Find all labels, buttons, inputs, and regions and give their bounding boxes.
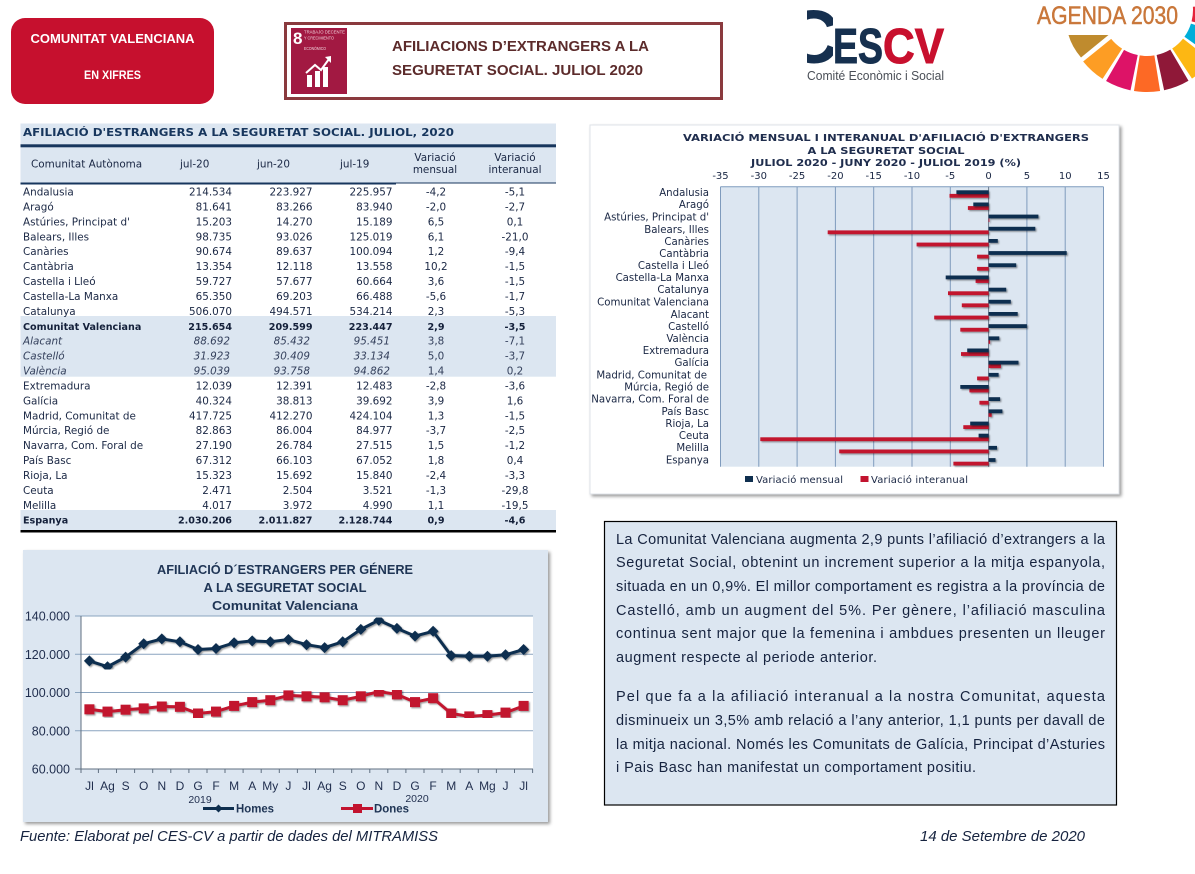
logo: CES-CV — [807, 10, 944, 80]
category labels: Aragó — [679, 199, 709, 211]
row: Rioja: -3,3 — [505, 470, 525, 482]
date: 14 de Setembre de 2020 — [920, 828, 1086, 845]
row: País Basc: 67.052 — [356, 455, 392, 467]
row: Cantàbria: 12.118 — [276, 261, 312, 273]
row: Comunitat Valenciana: 215.654 — [188, 322, 232, 333]
row: Aragó: -2,0 — [426, 201, 446, 213]
row: Extremadura — [23, 380, 525, 392]
x axis labels: Ag — [317, 779, 332, 793]
row: Galícia: 1,6 — [507, 395, 523, 407]
row: Cantàbria: 10,2 — [424, 261, 448, 273]
title text: SEGURETAT SOCIAL. JULIOL 2020 — [392, 63, 643, 79]
chart title: AFILIACIÓ D´ESTRANGERS PER GÉNERE — [157, 562, 413, 577]
row: Extremadura: Extremadura — [23, 380, 91, 392]
row: Castelló: -3,7 — [505, 351, 525, 363]
x axis labels: -35 — [712, 171, 729, 182]
band: Comunitat Valenciana rows — [20, 316, 556, 377]
x axis labels: Ag — [100, 779, 115, 793]
row: Rioja: Rioja, La — [23, 470, 67, 482]
badge: Comunitat Valenciana en xifres: EN XIFRES — [84, 68, 141, 82]
row: Cantàbria — [23, 261, 525, 273]
table header: Variació — [494, 152, 536, 164]
x axis labels: M — [229, 779, 239, 793]
row: Canàries: 100.094 — [350, 246, 393, 258]
category labels: València — [666, 333, 709, 345]
row: Cantàbria: 13.558 — [356, 261, 392, 273]
row: Múrcia: 84.977 — [356, 425, 392, 437]
row: Ceuta: 3.521 — [363, 485, 392, 497]
category labels: Astúries, Principat d' — [604, 212, 709, 224]
panel: data table — [20, 124, 556, 532]
row: Espanya: 0,9 — [428, 516, 445, 527]
x axis labels: -25 — [789, 171, 805, 182]
icon: SDG 8 decent work and economic growth — [291, 28, 347, 94]
row: Catalunya: 494.571 — [270, 306, 312, 318]
row: Comunitat Valenciana — [23, 322, 525, 333]
panel: bar chart variation — [590, 125, 1119, 494]
rule: table bottom — [20, 530, 556, 532]
bars: variació interanual — [760, 194, 1001, 466]
x axis labels: A — [465, 779, 473, 793]
category labels: Galícia — [675, 357, 709, 369]
row: Castella i Lleó: Castella i Lleó — [23, 276, 96, 288]
row: Madrid: 1,3 — [428, 410, 444, 422]
row: València: 95.039 — [194, 366, 230, 378]
x axis labels: Mg — [479, 779, 496, 793]
row: Aragó: 83.940 — [356, 201, 392, 213]
row: Astúries: 0,1 — [507, 216, 523, 228]
row: Castella-La Manxa: -5,6 — [426, 291, 446, 303]
row: Navarra: 27.190 — [196, 440, 232, 452]
row: Andalusia: 214.534 — [189, 186, 232, 198]
bars: variació mensual — [946, 190, 1067, 462]
x axis labels: 15 — [1097, 171, 1110, 182]
row: Castelló: 30.409 — [274, 351, 310, 363]
chart title: A LA SEGURETAT SOCIAL — [204, 580, 367, 595]
x axis labels: -10 — [904, 171, 920, 182]
table header — [20, 144, 556, 184]
row: Astúries: Astúries, Principat d' — [23, 216, 130, 228]
row: València: 94.862 — [354, 366, 390, 378]
row: Andalusia — [23, 186, 525, 198]
row: Astúries: 15.189 — [356, 216, 392, 228]
row: Cantàbria: -1,5 — [505, 261, 525, 273]
category labels: Ceuta — [679, 431, 709, 442]
x axis labels: -20 — [827, 171, 844, 182]
chart title: VARIACIÓ MENSUAL I INTERANUAL D'AFILIACIÓ D'EXTRANGERS — [683, 131, 1089, 144]
legend — [745, 474, 968, 486]
row: Alacant: 95.451 — [354, 336, 390, 348]
legend — [203, 802, 409, 816]
row: País Basc: 1,8 — [428, 455, 444, 467]
row: Múrcia: 86.004 — [276, 425, 313, 437]
x axis labels: M — [446, 779, 456, 793]
text block: analysis — [604, 522, 1116, 805]
row: Navarra: 1,5 — [428, 440, 444, 452]
row: Espanya: 2.030.206 — [178, 516, 232, 527]
row: Aragó: 81.641 — [196, 201, 232, 213]
table header: Comunitat Autònoma — [31, 158, 142, 170]
text block: analysis: Seguretat Social, obtenint un increment superior a la mitja espanyola, — [616, 555, 1105, 571]
category labels: País Basc — [662, 406, 709, 418]
row: Balears: -21,0 — [502, 231, 528, 243]
x axis labels: G — [410, 779, 420, 793]
x axis labels — [85, 779, 528, 806]
row: Melilla — [23, 500, 528, 512]
row: Astúries: 14.270 — [276, 216, 312, 228]
row: Balears: 93.026 — [276, 231, 312, 243]
legend: Variació interanual — [871, 474, 968, 486]
row: Espanya: 2.128.744 — [338, 516, 393, 527]
y axis labels — [25, 610, 70, 776]
y axis labels: 120.000 — [25, 648, 70, 662]
x axis labels: A — [248, 779, 256, 793]
row: Melilla: 4.017 — [202, 500, 232, 512]
row: Rioja: 15.323 — [196, 470, 232, 482]
row: País Basc: 67.312 — [196, 455, 232, 467]
category labels: Alacant — [671, 310, 709, 321]
row: Rioja: 15.692 — [276, 470, 312, 482]
row: País Basc — [23, 455, 524, 467]
x axis labels: Jl — [85, 779, 94, 793]
x axis labels: S — [122, 779, 130, 793]
row: Extremadura: 12.039 — [196, 380, 232, 392]
row: Castella-La Manxa: 69.203 — [276, 291, 312, 303]
category labels: Castella i Lleó — [638, 260, 709, 272]
row: Canàries — [23, 246, 526, 258]
table header: mensual — [413, 164, 457, 176]
row: Múrcia: 82.863 — [196, 425, 232, 437]
row: València: 0,2 — [507, 366, 523, 378]
row: Rioja: 15.840 — [356, 470, 392, 482]
logo: CES-CV: Comité Econòmic i Social — [807, 69, 944, 83]
source note: Fuente: Elaborat pel CES-CV a partir de dades del MITRAMISS — [20, 828, 438, 845]
row: País Basc: 0,4 — [507, 455, 524, 467]
row: Catalunya: Catalunya — [23, 306, 76, 318]
row: Astúries — [23, 216, 523, 228]
row: Navarra: 26.784 — [276, 440, 313, 452]
chart title: Comunitat Valenciana — [212, 598, 359, 613]
row: Múrcia: -2,5 — [505, 425, 525, 437]
row: València — [23, 366, 523, 378]
table header: jun-20 — [256, 158, 290, 170]
x axis labels: J — [502, 779, 508, 793]
row: Castella-La Manxa: 65.350 — [196, 291, 232, 303]
row: Alacant: 85.432 — [274, 336, 310, 348]
table header: Variació — [414, 152, 456, 164]
x axis labels: S — [339, 779, 347, 793]
row: Ceuta: -1,3 — [426, 485, 446, 497]
row: Castelló — [23, 351, 525, 363]
category labels: Múrcia, Regió de — [624, 382, 709, 394]
row: Extremadura: 12.483 — [356, 380, 392, 392]
x axis labels: 0 — [985, 171, 992, 182]
x axis labels: 2019 — [188, 794, 212, 806]
badge: Comunitat Valenciana en xifres: COMUNITAT VALENCIANA — [30, 32, 194, 46]
row: Ceuta: 2.504 — [283, 485, 313, 497]
category labels: Espanya — [666, 456, 709, 466]
text block: analysis: augment respecte al periode anterior. — [616, 650, 877, 666]
row: Galícia: Galícia — [23, 395, 58, 407]
legend: Homes — [236, 802, 274, 816]
text block: analysis: i Pais Basc han manifestat un comportament positiu. — [616, 760, 976, 776]
icon: SDG 8 decent work and economic growth: TRABAJO DECENTE — [304, 30, 345, 34]
row: Castella i Lleó: 3,6 — [428, 276, 444, 288]
row: Catalunya: 534.214 — [350, 306, 393, 318]
x axis labels: N — [157, 779, 166, 793]
icon: SDG 8 decent work and economic growth: ECONÓMICO — [304, 45, 326, 51]
row: Cantàbria: Cantàbria — [23, 261, 74, 273]
row: Castella-La Manxa: -1,7 — [505, 291, 525, 303]
row: Castella i Lleó: 59.727 — [196, 276, 232, 288]
row: Alacant: 3,8 — [428, 336, 444, 348]
row: Andalusia: 223.927 — [270, 186, 312, 198]
row: Castella-La Manxa — [23, 291, 525, 303]
icon: SDG 8 decent work and economic growth: 8 — [293, 29, 302, 48]
legend: Dones — [374, 802, 409, 816]
row: Melilla: -19,5 — [502, 500, 528, 512]
row: Catalunya: 506.070 — [189, 306, 232, 318]
category labels: Castelló — [668, 321, 709, 333]
row: Castella-La Manxa: Castella-La Manxa — [23, 291, 118, 303]
text block: analysis: Castelló, amb un augment del 5%. Per gènere, l’afiliació masculina — [616, 603, 1106, 619]
row: Navarra: 27.515 — [356, 440, 392, 452]
category labels: Madrid, Comunitat de — [596, 370, 707, 382]
row: Navarra — [23, 440, 525, 452]
row: Astúries: 15.203 — [196, 216, 232, 228]
row: Ceuta: Ceuta — [23, 485, 54, 497]
row: Madrid: -1,5 — [505, 410, 525, 422]
chart title — [683, 131, 1089, 169]
row: Balears: 6,1 — [428, 231, 444, 243]
row: Madrid: Madrid, Comunitat de — [23, 410, 136, 422]
row: Navarra: -1,2 — [505, 440, 525, 452]
row: Rioja: -2,4 — [426, 470, 447, 482]
row: Galícia — [23, 395, 523, 407]
row: Galícia: 3,9 — [428, 395, 444, 407]
row: Catalunya — [23, 306, 525, 318]
x axis labels: -5 — [945, 171, 955, 182]
row: Madrid — [23, 410, 525, 422]
row: Melilla: 4.990 — [363, 500, 392, 512]
row: Extremadura: -3,6 — [505, 380, 525, 392]
row: Canàries: 89.637 — [276, 246, 312, 258]
row: Ceuta: -29,8 — [502, 485, 528, 497]
category labels: Andalusia — [659, 188, 709, 199]
row: Andalusia: -4,2 — [426, 186, 446, 198]
row: Alacant: 88.692 — [194, 336, 230, 348]
chart title: A LA SEGURETAT SOCIAL — [808, 146, 965, 157]
row: País Basc: País Basc — [23, 455, 72, 467]
row: Alacant: -7,1 — [505, 336, 525, 348]
row: Andalusia: -5,1 — [505, 186, 525, 198]
row: Navarra: Navarra, Com. Foral de — [23, 440, 143, 452]
x axis labels: F — [429, 779, 437, 793]
y axis labels: 80.000 — [32, 724, 70, 738]
x axis labels: Jl — [302, 779, 311, 793]
row: Canàries: -9,4 — [505, 246, 526, 258]
row: València: 1,4 — [428, 366, 445, 378]
badge: Comunitat Valenciana en xifres — [11, 18, 214, 104]
line: Dones — [89, 692, 524, 716]
category labels: Balears, Illes — [644, 225, 709, 236]
row: Comunitat Valenciana: 209.599 — [269, 322, 313, 333]
row: Castella i Lleó: 60.664 — [356, 276, 393, 288]
row: València: València — [23, 366, 67, 378]
title text: AFILIACIONS D’EXTRANGERS A LA — [392, 39, 650, 55]
row: Andalusia: Andalusia — [23, 186, 74, 198]
row: Comunitat Valenciana: Comunitat Valenciana — [23, 322, 141, 333]
row: Catalunya: -5,3 — [505, 306, 525, 318]
row: Galícia: 39.692 — [356, 395, 392, 407]
row: Comunitat Valenciana: -3,5 — [505, 322, 525, 333]
table title — [20, 124, 556, 144]
row: Espanya: -4,6 — [505, 516, 526, 527]
legend: Variació mensual — [756, 474, 843, 486]
row: Aragó: -2,7 — [505, 201, 525, 213]
x axis labels: My — [262, 779, 278, 793]
row: Espanya — [23, 516, 526, 527]
table header: jul-20 — [179, 158, 209, 170]
row: Astúries: 6,5 — [428, 216, 444, 228]
row: Castella i Lleó: -1,5 — [505, 276, 525, 288]
category labels: Catalunya — [657, 285, 709, 296]
row: Alacant — [22, 336, 525, 348]
row: Balears: Balears, Illes — [23, 231, 89, 243]
row: Castella i Lleó: 57.677 — [276, 276, 312, 288]
panel: line chart by gender — [23, 550, 548, 822]
category labels: Navarra, Com. Foral de — [591, 394, 709, 406]
x axis labels: D — [393, 779, 402, 793]
category labels: Canàries — [664, 236, 709, 248]
line: Homes — [89, 620, 524, 667]
row: Alacant: Alacant — [22, 336, 63, 348]
x axis labels: 5 — [1024, 171, 1030, 182]
row: Galícia: 38.813 — [276, 395, 312, 407]
chart title — [157, 562, 413, 613]
logo: Agenda 2030 wheel — [1037, 0, 1195, 100]
x axis labels: -15 — [866, 171, 882, 182]
row: Múrcia: Múrcia, Regió de — [23, 425, 109, 437]
band: Espanya row — [20, 510, 556, 530]
x axis labels: N — [374, 779, 383, 793]
x axis labels — [712, 171, 1110, 182]
row: Comunitat Valenciana: 2,9 — [428, 322, 445, 333]
row: Rioja — [23, 470, 525, 482]
row: Canàries: Canàries — [23, 246, 69, 258]
row: Múrcia: -3,7 — [426, 425, 446, 437]
row: Madrid: 417.725 — [189, 410, 232, 422]
x axis labels: 2020 — [405, 793, 429, 805]
row: Canàries: 1,2 — [428, 246, 444, 258]
row: Melilla: Melilla — [23, 500, 56, 512]
row: Extremadura: 12.391 — [276, 380, 312, 392]
text block: analysis: Pel que fa a la afiliació interanual a la nostra Comunitat, aquesta — [616, 689, 1106, 705]
row: Espanya: Espanya — [23, 516, 68, 527]
title text — [392, 39, 650, 79]
plot area and grid — [720, 187, 1104, 467]
category labels — [591, 188, 709, 466]
row: Aragó: 83.266 — [276, 201, 312, 213]
text block: analysis: situada en un 0,9%. El millor comportament es registra a la província de — [616, 579, 1105, 595]
table header: interanual — [488, 164, 542, 176]
text block: analysis: la mitja nacional. Només les Comunitats de Galícia, Principat d’Asturies — [616, 737, 1105, 753]
row: Espanya: 2.011.827 — [258, 516, 312, 527]
row: València: 93.758 — [274, 366, 310, 378]
y axis labels: 60.000 — [32, 762, 70, 776]
category labels: Rioja, La — [665, 419, 709, 430]
row: Ceuta — [23, 485, 528, 497]
category labels: Comunitat Valenciana — [597, 298, 709, 308]
x axis labels: F — [212, 779, 220, 793]
x axis labels: O — [139, 779, 148, 793]
row: Castelló: 33.134 — [354, 351, 390, 363]
row: Galícia: 40.324 — [196, 395, 232, 407]
title box — [286, 24, 722, 98]
row: Comunitat Valenciana: 223.447 — [349, 322, 392, 333]
plot area — [75, 616, 533, 773]
row: Aragó — [23, 201, 525, 213]
row: Castelló: Castelló — [23, 351, 65, 363]
row: Castella-La Manxa: 66.488 — [356, 291, 392, 303]
row: Balears: 125.019 — [350, 231, 392, 243]
row: Ceuta: 2.471 — [202, 485, 232, 497]
logo: CES-CV: ES — [833, 20, 883, 74]
row: Andalusia: 225.957 — [350, 186, 392, 198]
row: Castella i Lleó — [23, 276, 525, 288]
row: Melilla: 1,1 — [428, 500, 444, 512]
x axis labels: D — [176, 779, 185, 793]
x axis labels: G — [193, 779, 203, 793]
row: Catalunya: 2,3 — [428, 306, 444, 318]
row: Balears — [23, 231, 528, 243]
x axis labels: J — [285, 779, 291, 793]
row: Castelló: 31.923 — [194, 351, 230, 363]
row: Cantàbria: 13.354 — [196, 261, 232, 273]
row: Balears: 98.735 — [196, 231, 232, 243]
text block: analysis: La Comunitat Valenciana augmenta 2,9 punts l’afiliació d’extrangers a la — [616, 532, 1106, 548]
row: Canàries: 90.674 — [196, 246, 232, 258]
x axis labels: -30 — [751, 171, 767, 182]
logo: CES-CV: CV — [883, 20, 944, 74]
category labels: Extremadura — [643, 346, 709, 357]
category labels: Cantàbria — [659, 248, 709, 260]
y axis labels: 140.000 — [25, 610, 70, 624]
x axis labels: Jl — [519, 779, 528, 793]
text block: analysis: disminueix un 3,5% amb relació a l’any anterior, 1,1 punts per davall de — [616, 713, 1105, 729]
category labels: Castella-La Manxa — [616, 273, 709, 284]
row: Múrcia — [23, 425, 525, 437]
category labels: Melilla — [676, 443, 709, 454]
row: Madrid: 424.104 — [350, 410, 393, 422]
x axis labels: O — [356, 779, 365, 793]
text block: analysis: continua sent major que la femenina i ambdues presenten un lleuger — [616, 626, 1105, 642]
y axis labels: 100.000 — [25, 686, 70, 700]
table title: AFILIACIÓ D'ESTRANGERS A LA SEGURETAT SOCIAL. JULIOL, 2020 — [23, 126, 454, 139]
row: Melilla: 3.972 — [283, 500, 312, 512]
row: Aragó: Aragó — [23, 201, 54, 213]
x axis labels: 10 — [1059, 171, 1072, 182]
row: Castelló: 5,0 — [428, 351, 444, 363]
row: País Basc: 66.103 — [276, 455, 312, 467]
row: Extremadura: -2,8 — [426, 380, 446, 392]
chart title: JULIOL 2020 - JUNY 2020 - JULIOL 2019 (%) — [750, 158, 1021, 169]
row: Madrid: 412.270 — [270, 410, 312, 422]
table header: jul-19 — [339, 158, 369, 170]
icon: SDG 8 decent work and economic growth: Y CRECIMIENTO — [304, 36, 334, 40]
